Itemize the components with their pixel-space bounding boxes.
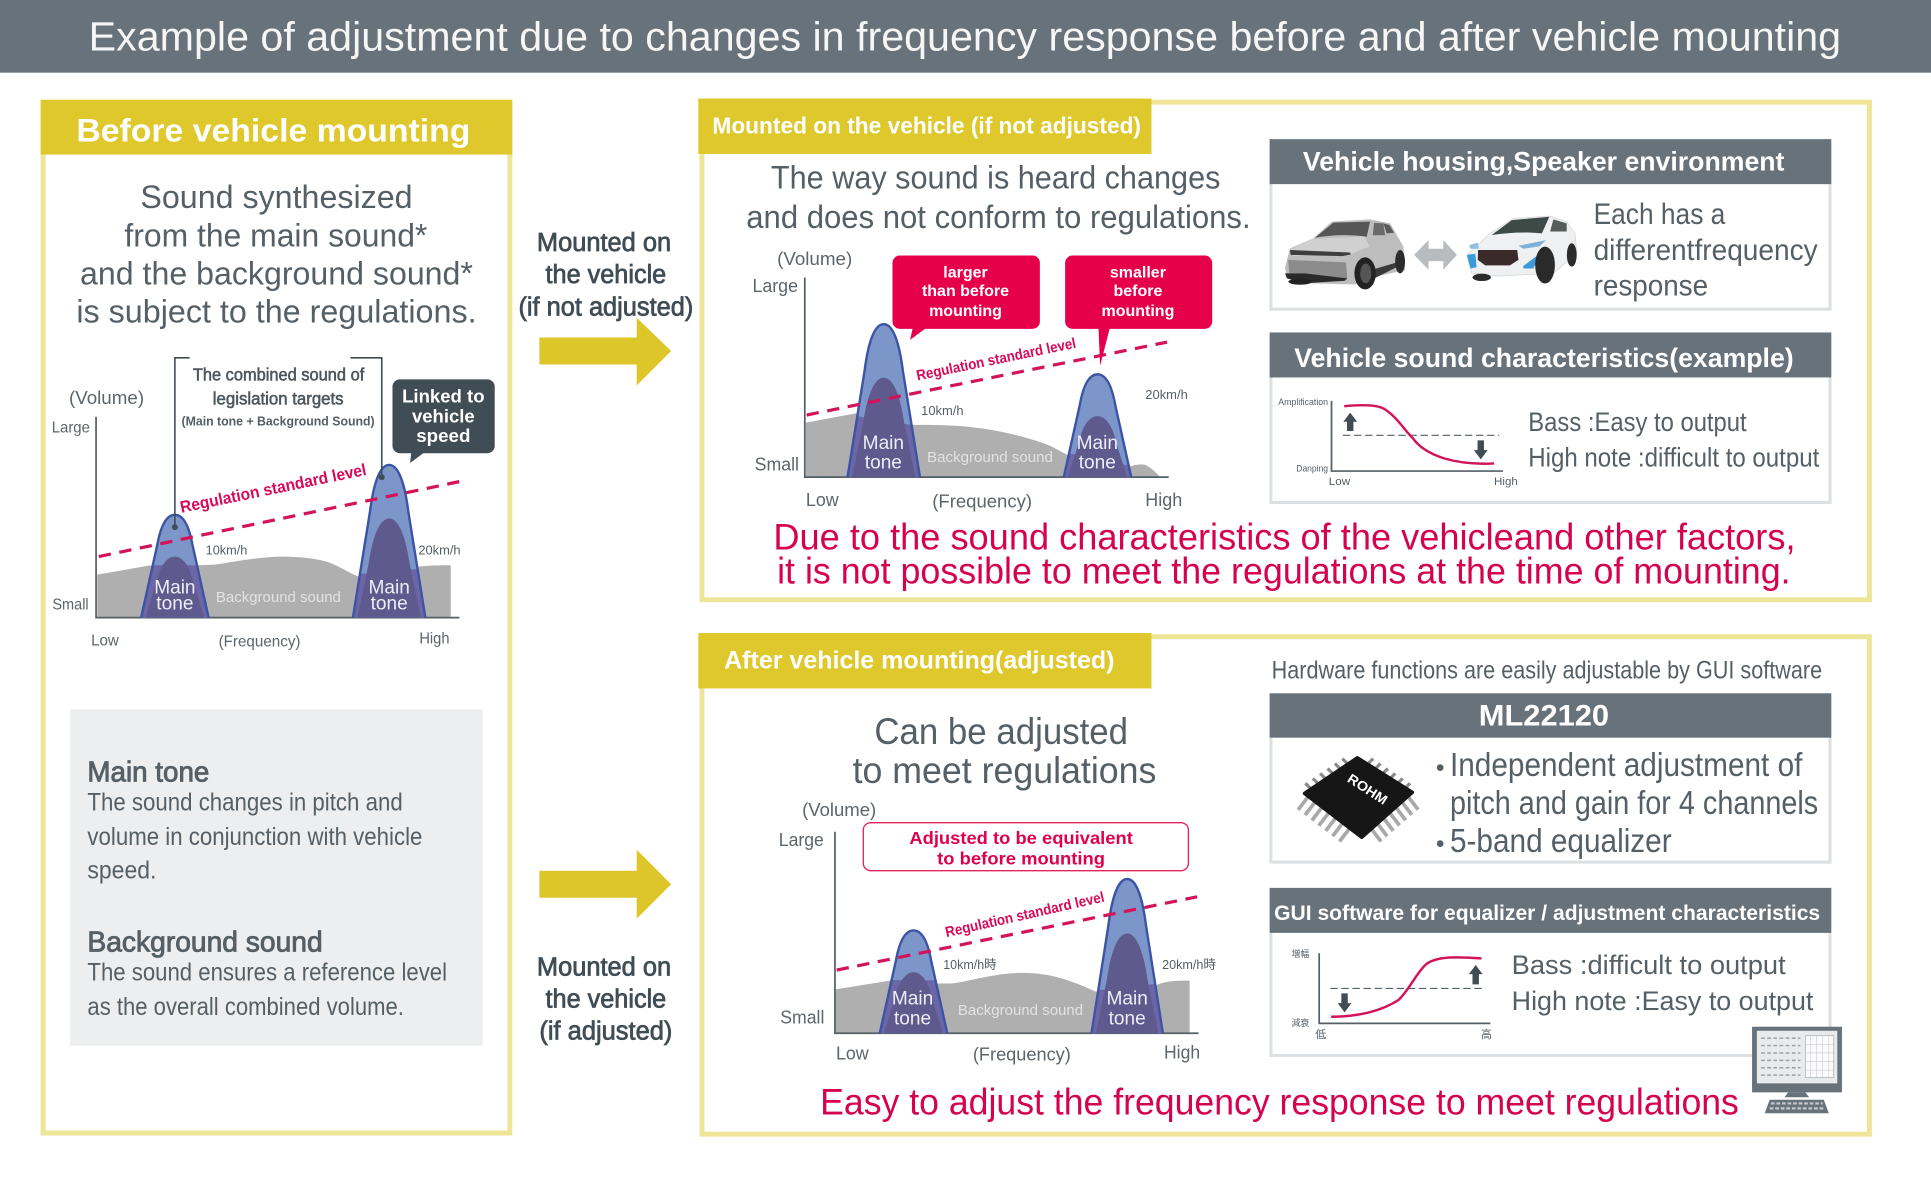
callout: linked to vehicle speed: vehicle bbox=[412, 405, 475, 426]
text: chip features: • bbox=[1436, 831, 1445, 858]
text: bass and high note after adjustment bbox=[1512, 949, 1814, 1016]
arrow label: mounted if not adjusted: Mounted on bbox=[537, 229, 671, 257]
chart: sound mounted without adjustment: Large bbox=[752, 275, 798, 296]
peak: main tone 20 km/h bbox=[1091, 879, 1163, 1033]
description text: to meet regulations bbox=[853, 750, 1156, 791]
chart: sound mounted with adjustment: Main bbox=[892, 988, 933, 1009]
chart: sound mounted without adjustment: High bbox=[1145, 489, 1182, 510]
chart: sound mounted with adjustment: Regulation standard level bbox=[944, 890, 1106, 941]
text: chip features: pitch and gain for 4 channels bbox=[1450, 785, 1818, 822]
text: bass and high note after adjustment: High note :Easy to output bbox=[1512, 985, 1814, 1016]
box: vehicle housing and speaker environment bbox=[1270, 139, 1831, 309]
callout: larger than before mounting bbox=[892, 256, 1040, 340]
icon: double arrow bbox=[1414, 240, 1457, 270]
chart: sound mounted with adjustment: High bbox=[1164, 1041, 1200, 1062]
text: chip features bbox=[1436, 747, 1818, 860]
text: each has a different frequency response bbox=[1594, 198, 1818, 303]
peak: main tone 20 km/h bbox=[353, 465, 425, 618]
chart: sound before mounting: Main bbox=[368, 578, 410, 599]
box: vehicle housing and speaker environment: Vehicle housing,Speaker environment bbox=[1303, 146, 1784, 177]
chart: sound before mounting: Regulation standard level bbox=[178, 460, 368, 517]
callout: larger than before mounting: than before bbox=[922, 283, 1009, 300]
chart: sound mounted with adjustment: (Volume) bbox=[802, 799, 876, 820]
glossary box bbox=[70, 709, 483, 1046]
chart: sound mounted with adjustment: Small bbox=[780, 1006, 824, 1027]
chart: sound before mounting: Low bbox=[91, 632, 119, 649]
heading: before vehicle mounting: Before vehicle mounting bbox=[76, 113, 470, 149]
arrow label: mounted if not adjusted bbox=[518, 229, 693, 321]
chart: sound mounted without adjustment: Low bbox=[806, 489, 839, 510]
box: GUI software adjustment characteristics bbox=[1270, 888, 1831, 1055]
chart: sound before mounting: High bbox=[419, 630, 449, 647]
chart: sound mounted without adjustment: Small bbox=[755, 453, 799, 474]
description text bbox=[853, 711, 1156, 791]
box: GUI software adjustment characteristics: GUI software for equalizer / adjustment characteristics bbox=[1274, 900, 1820, 925]
chart: sound mounted with adjustment bbox=[779, 799, 1216, 1064]
chart: sound mounted with adjustment: 20km/h時 bbox=[1162, 957, 1216, 972]
chart: sound before mounting: Main bbox=[154, 578, 196, 599]
description text: Sound synthesized bbox=[140, 179, 413, 215]
callout: adjusted to be equivalent bbox=[863, 823, 1188, 871]
description text: and does not conform to regulations. bbox=[746, 199, 1251, 235]
arrow label: mounted if adjusted: the vehicle bbox=[546, 985, 666, 1013]
chart: sound mounted without adjustment: Main bbox=[1077, 433, 1118, 454]
glossary box: Background sound bbox=[87, 926, 323, 958]
chart: sound mounted without adjustment bbox=[752, 248, 1188, 511]
chart: sound mounted with adjustment: tone bbox=[894, 1008, 931, 1029]
box: ML22120 bbox=[1270, 693, 1831, 862]
arrow label: mounted if adjusted: (if adjusted) bbox=[539, 1017, 672, 1045]
callout: smaller before mounting: mounting bbox=[1101, 303, 1174, 320]
title bar: Example of adjustment due to changes in frequency response before and after vehicle mounting bbox=[89, 14, 1841, 60]
chart: vehicle sound curve: Low bbox=[1329, 476, 1351, 488]
callout: linked to vehicle speed bbox=[392, 379, 495, 463]
panel: before vehicle mounting bbox=[41, 100, 512, 1133]
chart: sound mounted with adjustment: tone bbox=[1109, 1008, 1146, 1029]
glossary box: speed. bbox=[87, 858, 156, 885]
bracket: combined sound annotation: The combined sound of bbox=[193, 365, 364, 385]
chart: sound before mounting: tone bbox=[156, 594, 193, 615]
peak: main tone 10 km/h bbox=[880, 930, 947, 1033]
callout: larger than before mounting: mounting bbox=[929, 303, 1002, 320]
description text bbox=[76, 179, 477, 330]
arrow: before to adjusted bbox=[539, 850, 671, 919]
bracket: combined sound annotation: (Main tone + Background Sound) bbox=[182, 414, 375, 429]
arrow label: mounted if adjusted bbox=[537, 953, 672, 1045]
chart: vehicle sound curve: Danping bbox=[1296, 464, 1328, 474]
chart: adjustment curve: 低 bbox=[1315, 1028, 1326, 1041]
chart: sound before mounting: Small bbox=[52, 597, 89, 614]
callout: linked to vehicle speed: Linked to bbox=[402, 386, 485, 407]
chart: sound mounted with adjustment: Low bbox=[836, 1042, 869, 1063]
text: bass and high note characteristics: Bass :Easy to output bbox=[1528, 406, 1747, 437]
chart: sound mounted with adjustment: Background sound bbox=[958, 1003, 1083, 1019]
chart: sound before mounting: (Frequency) bbox=[219, 634, 300, 651]
glossary box: volume in conjunction with vehicle bbox=[87, 824, 422, 851]
chart: sound before mounting: 10km/h bbox=[206, 543, 247, 558]
heading: before vehicle mounting bbox=[41, 100, 512, 155]
chart: adjustment curve: 減衰 bbox=[1291, 1017, 1309, 1028]
description text: The way sound is heard changes bbox=[771, 159, 1220, 195]
text: bass and high note characteristics: High note :difficult to output bbox=[1528, 442, 1820, 473]
callout: adjusted to be equivalent: Adjusted to be equivalent bbox=[909, 828, 1133, 848]
text: bass and high note after adjustment: Bass :difficult to output bbox=[1512, 949, 1786, 980]
chart: sound mounted with adjustment: Main bbox=[1107, 988, 1148, 1009]
box: vehicle sound characteristics bbox=[1270, 333, 1831, 502]
box: ML22120: ML22120 bbox=[1479, 699, 1609, 732]
text: chip features: 5-band equalizer bbox=[1450, 823, 1672, 860]
text: chip features: • bbox=[1436, 755, 1445, 782]
chart: sound before mounting: tone bbox=[371, 594, 408, 615]
chart: sound mounted with adjustment: (Frequency) bbox=[973, 1043, 1071, 1064]
icon: ROHM chip bbox=[1298, 758, 1418, 842]
chart: adjustment curve: 増幅 bbox=[1291, 948, 1309, 959]
chart: sound mounted without adjustment: (Frequency) bbox=[932, 490, 1032, 511]
conclusion text: cannot meet regulations bbox=[773, 516, 1796, 592]
chart: sound before mounting bbox=[52, 387, 461, 651]
chart: vehicle sound curve: Amplification bbox=[1278, 397, 1328, 407]
heading: mounted if not adjusted: Mounted on the vehicle (if not adjusted) bbox=[712, 113, 1141, 139]
heading: mounted if not adjusted bbox=[698, 99, 1151, 154]
chart: sound mounted with adjustment: Large bbox=[779, 829, 824, 850]
arrow label: mounted if adjusted: Mounted on bbox=[537, 953, 671, 981]
arrow label: mounted if not adjusted: the vehicle bbox=[546, 261, 666, 289]
conclusion text: easy to adjust: Easy to adjust the frequency response to meet regulations bbox=[820, 1082, 1739, 1123]
chart: sound mounted without adjustment: tone bbox=[865, 453, 902, 474]
text: each has a different frequency response: differentfrequency bbox=[1594, 234, 1818, 267]
bracket: combined sound annotation: legislation targets bbox=[213, 389, 344, 409]
description text: Can be adjusted bbox=[874, 711, 1128, 752]
conclusion text: cannot meet regulations: it is not possible to meet the regulations at the time of mounting. bbox=[777, 551, 1791, 592]
panel: after vehicle mounting, adjusted bbox=[698, 633, 1869, 1134]
text: hardware functions note: Hardware functions are easily adjustable by GUI software bbox=[1272, 658, 1822, 685]
panel: mounted on the vehicle, not adjusted bbox=[698, 99, 1869, 600]
text: chip features: Independent adjustment of bbox=[1450, 747, 1803, 784]
description text: from the main sound* bbox=[124, 217, 427, 253]
chart: sound mounted without adjustment: tone bbox=[1079, 453, 1116, 474]
description text: is subject to the regulations. bbox=[76, 294, 477, 330]
glossary box: The sound ensures a reference level bbox=[87, 959, 447, 986]
icon: computer monitor with GUI software bbox=[1752, 1027, 1842, 1113]
icon: ROHM chip: ROHM bbox=[1345, 771, 1390, 808]
callout: smaller before mounting: before bbox=[1113, 283, 1162, 300]
chart: sound mounted without adjustment: Background sound bbox=[927, 450, 1053, 466]
arrow label: mounted if not adjusted: (if not adjusted) bbox=[518, 293, 693, 321]
chart: adjustment curve bbox=[1291, 948, 1492, 1041]
chart: sound mounted without adjustment: (Volume) bbox=[777, 248, 852, 269]
heading: after vehicle mounting adjusted: After vehicle mounting(adjusted) bbox=[724, 648, 1115, 675]
glossary box: The sound changes in pitch and bbox=[87, 789, 403, 816]
icon: hatchback bbox=[1467, 216, 1577, 284]
callout: smaller before mounting bbox=[1065, 256, 1212, 366]
chart: sound mounted without adjustment: Regulation standard level bbox=[915, 336, 1077, 384]
heading: after vehicle mounting adjusted bbox=[698, 633, 1151, 688]
description text: and the background sound* bbox=[80, 255, 473, 291]
chart: vehicle sound curve bbox=[1278, 397, 1518, 488]
chart: sound mounted without adjustment: Main bbox=[863, 433, 904, 454]
conclusion text: cannot meet regulations: Due to the sound characteristics of the vehicleand other factors, bbox=[773, 516, 1796, 557]
arrow: before to not adjusted bbox=[539, 318, 671, 385]
callout: linked to vehicle speed: speed bbox=[416, 425, 470, 446]
peak: main tone 10 km/h bbox=[848, 324, 920, 477]
description text bbox=[746, 159, 1251, 235]
bracket: combined sound annotation bbox=[172, 358, 385, 530]
callout: smaller before mounting: smaller bbox=[1110, 265, 1166, 282]
glossary box: Main tone bbox=[87, 756, 209, 788]
peak: main tone 10 km/h bbox=[141, 515, 209, 618]
chart: sound mounted with adjustment: 10km/h時 bbox=[943, 957, 997, 972]
chart: sound before mounting: Background sound bbox=[216, 590, 341, 606]
chart: sound mounted without adjustment: 20km/h bbox=[1145, 387, 1188, 402]
chart: vehicle sound curve: High bbox=[1494, 476, 1518, 488]
text: each has a different frequency response: response bbox=[1594, 270, 1708, 303]
box: vehicle sound characteristics: Vehicle sound characteristics(example) bbox=[1294, 342, 1794, 373]
callout: adjusted to be equivalent: to before mounting bbox=[937, 848, 1105, 868]
chart: sound before mounting: Large bbox=[52, 419, 90, 436]
title bar bbox=[0, 0, 1931, 73]
glossary box: as the overall combined volume. bbox=[87, 994, 404, 1021]
chart: sound mounted without adjustment: 10km/h bbox=[921, 403, 964, 418]
callout: larger than before mounting: larger bbox=[943, 265, 988, 282]
text: each has a different frequency response: Each has a bbox=[1594, 198, 1726, 231]
chart: sound before mounting: (Volume) bbox=[69, 387, 144, 408]
text: bass and high note characteristics bbox=[1528, 406, 1820, 473]
peak: main tone 20 km/h bbox=[1064, 374, 1131, 477]
chart: adjustment curve: 高 bbox=[1481, 1027, 1492, 1041]
chart: sound before mounting: 20km/h bbox=[418, 543, 461, 558]
icon: SUV bbox=[1285, 219, 1405, 289]
